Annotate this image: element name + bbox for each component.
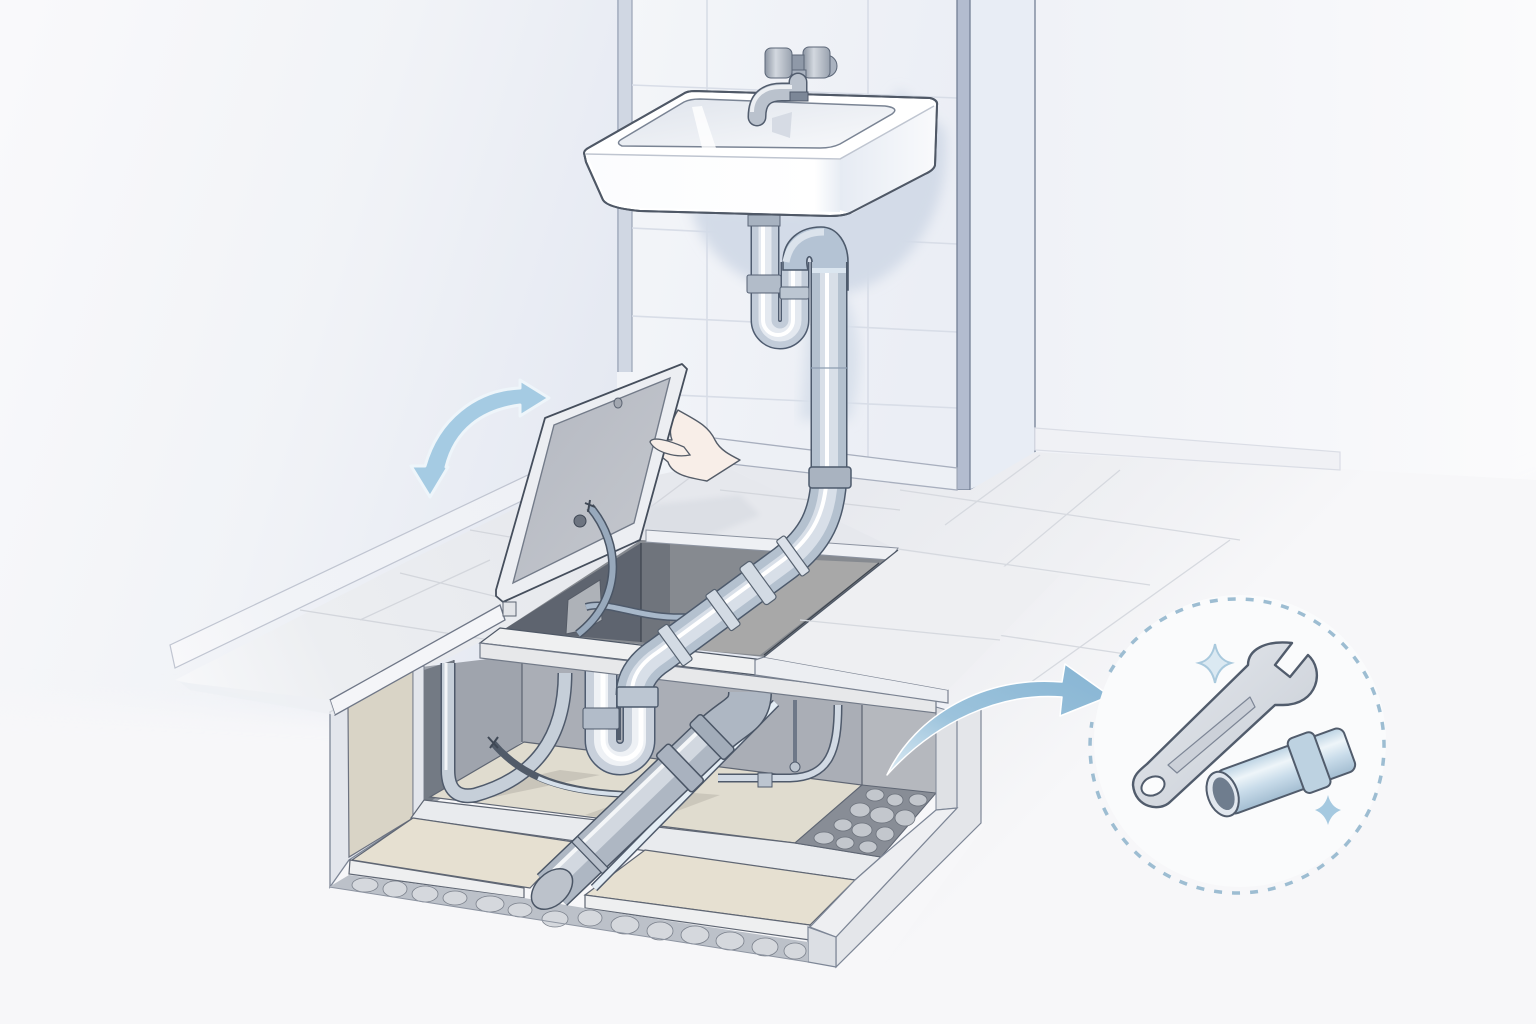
lower drain pipe xyxy=(524,692,750,917)
collar: first xyxy=(776,535,810,577)
gravel patch xyxy=(795,785,936,857)
thumb xyxy=(650,439,690,456)
hose on lid xyxy=(578,507,613,634)
pit side wall xyxy=(413,655,522,818)
small pipes in pit xyxy=(446,663,838,796)
collar: second xyxy=(739,560,777,606)
curved arrow to detail xyxy=(887,664,1110,775)
right baseboard xyxy=(1035,428,1340,470)
hose in opening xyxy=(586,606,690,617)
lid shadow on floor xyxy=(640,495,760,540)
rear baseboard xyxy=(714,438,957,490)
panel: sink trap and standpipe xyxy=(747,215,809,335)
double-headed arrow xyxy=(411,380,549,497)
right foundation slab xyxy=(585,850,855,925)
bottom floor fade xyxy=(0,470,1536,1024)
left floor edge xyxy=(180,605,505,715)
cross beam xyxy=(480,628,936,713)
hand xyxy=(650,410,740,481)
pipe shadow on wall xyxy=(800,290,859,420)
back slab xyxy=(430,742,862,843)
right wall xyxy=(1035,0,1536,520)
left baseboard xyxy=(170,474,530,668)
tiled wall xyxy=(617,0,960,480)
pier column xyxy=(957,0,1035,490)
floor opening xyxy=(503,530,898,657)
right floor slab front xyxy=(755,550,1060,703)
sparkle large xyxy=(1199,644,1231,683)
lid latch xyxy=(614,398,622,408)
elbow nut xyxy=(617,687,658,707)
bracket xyxy=(566,580,602,634)
pit back wall xyxy=(522,655,936,793)
collar: floor joint xyxy=(809,467,851,488)
left floor xyxy=(175,462,898,715)
lower trap xyxy=(583,670,641,759)
thin lower pipe xyxy=(594,703,776,888)
panel: cutaway pit xyxy=(329,655,981,967)
outer left wall xyxy=(330,667,413,887)
gravel bed xyxy=(329,875,808,962)
wrench xyxy=(1133,642,1317,807)
wash basin xyxy=(584,91,937,216)
right floor tile lines xyxy=(830,455,1300,690)
floor shadows xyxy=(450,770,600,800)
sparkle small xyxy=(1315,795,1341,825)
left stone face xyxy=(348,668,413,857)
grommet xyxy=(574,515,586,527)
main drain pipe xyxy=(617,227,851,707)
left foundation slab xyxy=(352,818,574,888)
faucet handles xyxy=(765,47,837,100)
wash basin shadow xyxy=(690,90,946,296)
collar: third xyxy=(705,589,741,631)
spout xyxy=(752,82,808,117)
pipe connector xyxy=(1199,721,1359,826)
pipe arch xyxy=(783,227,848,290)
access lid xyxy=(496,364,690,634)
right pit wall xyxy=(936,707,957,810)
right floor xyxy=(716,452,1536,1024)
detail circle xyxy=(1090,595,1386,893)
concrete strip xyxy=(411,800,881,880)
left floor tile lines xyxy=(300,470,900,640)
collar: fourth xyxy=(657,624,693,666)
